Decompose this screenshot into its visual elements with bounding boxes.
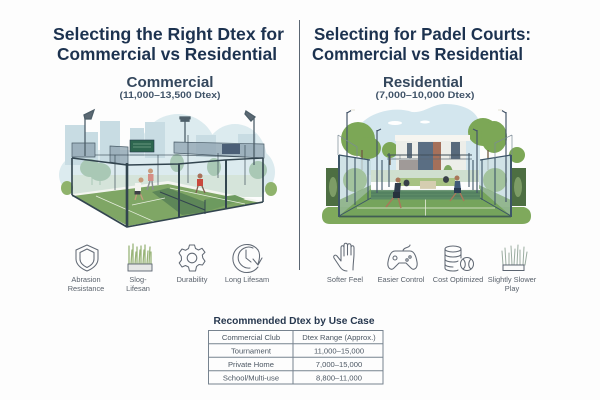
table: recommended dtex: 11,000–15,000 xyxy=(314,346,364,356)
label: softer feel: Softer Feel xyxy=(327,275,363,284)
title: right: Selecting for Padel Courts: xyxy=(314,24,531,44)
label: easier control: Easier Control xyxy=(378,275,425,284)
back panels xyxy=(72,142,264,165)
table heading: Recommended Dtex by Use Case xyxy=(214,316,375,327)
court floor xyxy=(73,184,261,226)
icon: short turf xyxy=(502,245,527,270)
side glass and planting xyxy=(339,155,371,216)
table: recommended dtex: Commercial Club xyxy=(222,333,280,342)
icon: game controller xyxy=(388,245,417,269)
hedges xyxy=(326,168,340,206)
illustration: residential padel court xyxy=(322,104,531,224)
icon: clock with arrow xyxy=(233,245,262,272)
icon: turf sample xyxy=(128,244,152,271)
table: recommended dtex: Dtex Range (Approx.) xyxy=(302,333,376,342)
trees xyxy=(341,118,525,163)
label: long lifesam: Long Lifesam xyxy=(225,275,269,284)
table: recommended dtex: 7,000–15,000 xyxy=(316,360,362,369)
heading: commercial xyxy=(120,75,220,100)
net xyxy=(371,190,480,200)
table: recommended dtex: Tournament xyxy=(231,346,272,356)
heading: residential: (7,000–10,000 Dtex) xyxy=(376,90,474,100)
icon: gear xyxy=(179,245,205,271)
players xyxy=(134,168,205,200)
city buildings xyxy=(65,121,256,165)
table: recommended dtex: 8,800–11,000 xyxy=(316,374,362,382)
trees and lawn behind court xyxy=(72,175,262,197)
label: cost optimized: Cost Optimized xyxy=(433,275,483,284)
title: left: Selecting the Right Dtex for xyxy=(53,24,284,44)
heading: residential: Residential xyxy=(383,75,463,91)
label: abrasion resistance: Abrasion xyxy=(71,275,101,284)
icon: hand xyxy=(334,243,354,271)
glass frame xyxy=(72,135,263,227)
table: recommended dtex: Private Home xyxy=(228,360,274,369)
table: recommended dtex xyxy=(208,330,383,384)
heading: residential xyxy=(376,75,474,100)
icon: coins and ball xyxy=(445,246,474,271)
players xyxy=(386,176,464,208)
court floor xyxy=(339,189,511,216)
sky xyxy=(360,104,480,175)
title: left: Commercial vs Residential xyxy=(57,44,277,64)
house xyxy=(396,140,466,178)
title: right: Commercial vs Residential xyxy=(312,44,523,64)
floodlights xyxy=(347,109,506,202)
label: slog-lifesan: Slog- xyxy=(129,275,147,284)
illustration: commercial padel court xyxy=(59,110,277,227)
glass frame xyxy=(338,135,512,217)
scoreboard xyxy=(130,140,154,152)
lawn base xyxy=(322,207,531,224)
label: slightly slower play: Slightly Slower xyxy=(488,275,537,284)
label: durability: Durability xyxy=(177,275,208,284)
title: right xyxy=(312,24,531,64)
icon: shield xyxy=(76,245,98,271)
title: left xyxy=(53,24,284,64)
label: slightly slower play: Play xyxy=(505,284,519,293)
backdrop haze xyxy=(59,114,275,197)
label: abrasion resistance: Resistance xyxy=(68,284,104,293)
table: recommended dtex: School/Multi-use xyxy=(223,374,279,382)
label: slog-lifesan: Lifesan xyxy=(126,284,150,293)
heading: commercial: Commercial xyxy=(126,75,214,91)
white court edge xyxy=(73,181,262,204)
floodlights xyxy=(84,110,255,165)
heading: commercial: (11,000–13,500 Dtex) xyxy=(120,90,220,100)
